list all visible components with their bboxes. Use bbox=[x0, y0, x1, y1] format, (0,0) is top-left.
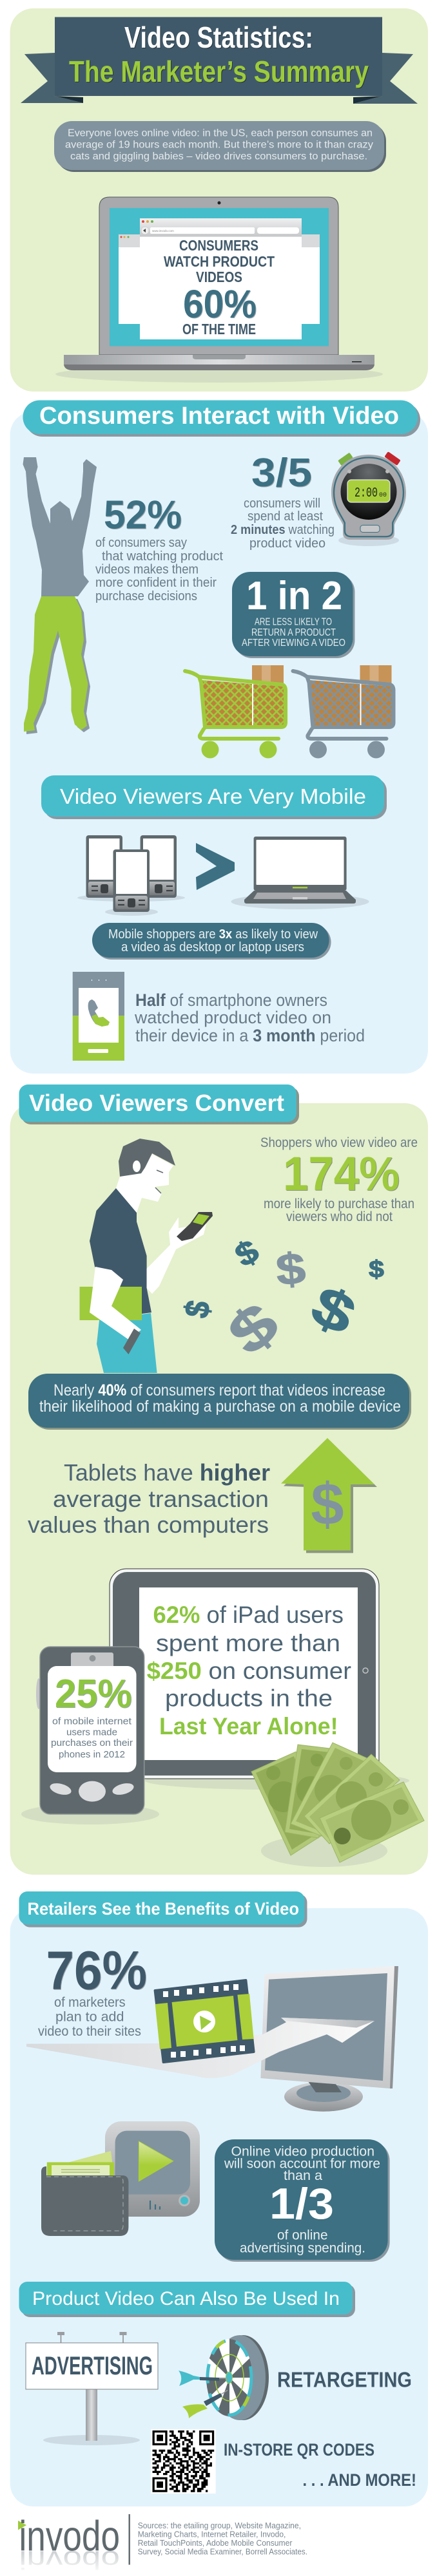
callout: nearly 40% bbox=[28, 1374, 411, 1430]
callout: online video production 1/3: will soon account for more bbox=[224, 2156, 380, 2171]
icon: advertising billboard: ADVERTISING bbox=[32, 2352, 153, 2380]
section heading: Consumers Interact with Video: Consumers Interact with Video bbox=[39, 402, 399, 430]
laptop with browser stat: WATCH PRODUCT bbox=[164, 253, 275, 270]
icon: stopwatch bbox=[331, 451, 406, 546]
icon: floating dollar signs: $ bbox=[369, 1256, 384, 1282]
section heading: Retailers See the Benefits of Video: Retailers See the Benefits of Video bbox=[27, 1899, 299, 1918]
logo: invodo: invodo bbox=[19, 2546, 120, 2574]
stat: 52%: more confident in their bbox=[95, 576, 217, 590]
callout: mobile shoppers 3x bbox=[92, 923, 331, 960]
stat: 76%: plan to add bbox=[55, 2010, 124, 2025]
panel: consumers interact with video bbox=[10, 401, 428, 1074]
callout: 1 in 2: 1 in 2 bbox=[246, 574, 342, 618]
stat: 52%: 52% bbox=[104, 493, 182, 537]
intro text pill: average of 19 hours each month. But there’s more to it than crazy bbox=[65, 139, 373, 151]
stat: 174%: Shoppers who view video are bbox=[260, 1135, 418, 1150]
panel: intro bbox=[10, 8, 428, 392]
panel: video viewers convert bbox=[10, 1084, 428, 1875]
logo: invodo bbox=[18, 2512, 120, 2574]
icon: floating dollar signs: $ bbox=[274, 1244, 307, 1294]
text: half of smartphone owners: Half of smartphone owners bbox=[135, 990, 327, 1010]
icon: floating dollar signs: $ bbox=[177, 1298, 218, 1321]
callout: online video production 1/3: than a bbox=[284, 2168, 322, 2183]
phone with 25% stat: users made bbox=[66, 1727, 117, 1738]
section heading: Consumers Interact with Video bbox=[23, 401, 420, 437]
intro text pill: Everyone loves online video: in the US, each person consumes an bbox=[68, 128, 373, 139]
callout: 1 in 2: RETURN A PRODUCT bbox=[251, 627, 336, 638]
section heading: Retailers See the Benefits of Video bbox=[19, 1891, 307, 1927]
icon: floating dollar signs bbox=[177, 1233, 384, 1368]
text: tablets have higher: Tablets have higher bbox=[64, 1459, 270, 1486]
callout: 1 in 2: AFTER VIEWING A VIDEO bbox=[242, 638, 345, 649]
phone with 25% stat: 25% bbox=[55, 1672, 132, 1716]
subheading: Product Video Can Also Be Used In bbox=[19, 2282, 355, 2317]
icon: greater-than sign bbox=[196, 843, 235, 890]
divider line bbox=[129, 2514, 130, 2564]
icon: stopwatch: 00 bbox=[379, 492, 387, 499]
label: retargeting: RETARGETING bbox=[277, 2367, 412, 2392]
icon: advertising billboard bbox=[26, 2332, 158, 2445]
text: tablets have higher bbox=[28, 1459, 270, 1538]
section heading: Video Viewers Convert bbox=[19, 1084, 299, 1124]
icon: video player bbox=[105, 2121, 200, 2217]
logo: invodo: invodo bbox=[19, 2512, 120, 2559]
icon: monitor bbox=[260, 1966, 398, 2112]
panel: retailers see the benefits bbox=[10, 1891, 428, 2506]
callout: 1 in 2: ARE LESS LIKELY TO bbox=[255, 617, 332, 627]
stat: 174%: viewers who did not bbox=[286, 1209, 393, 1224]
icon: up arrow with dollar bbox=[281, 1438, 377, 1553]
icon: fanned money bbox=[251, 1743, 424, 1867]
tablet with iPad stat: spent more than bbox=[156, 1630, 340, 1656]
title banner: The Marketer’s Summary bbox=[69, 55, 369, 88]
stat: 3/5: 2 minutes watching bbox=[231, 523, 335, 537]
stat: 3/5: spend at least bbox=[248, 509, 323, 524]
text: sources: Marketing Charts, Internet Retailer, Invodo, bbox=[138, 2530, 286, 2539]
laptop with browser stat bbox=[55, 197, 383, 383]
title banner bbox=[21, 17, 418, 104]
subheading: Video Viewers Are Very Mobile: Video Viewers Are Very Mobile bbox=[60, 784, 366, 808]
stat: 76%: 76% bbox=[46, 1940, 147, 2001]
stat: 174%: more likely to purchase than bbox=[264, 1197, 414, 1211]
icon: up arrow with dollar: $ bbox=[311, 1472, 344, 1537]
text: half of smartphone owners: watched product video on bbox=[134, 1008, 331, 1027]
tablet with iPad stat: Last Year Alone! bbox=[159, 1713, 338, 1739]
callout: 1 in 2 bbox=[232, 572, 354, 658]
stat: 52%: that watching product bbox=[102, 549, 223, 564]
laptop with browser stat: 60% bbox=[183, 282, 257, 326]
stat: 76%: of marketers bbox=[54, 1995, 126, 2010]
icon: stopwatch: 2:00 bbox=[354, 486, 378, 501]
laptop with browser stat: www.invodo.com bbox=[152, 229, 174, 232]
label: and more: . . . AND MORE! bbox=[303, 2470, 416, 2490]
icon: wallet with cash bbox=[41, 2151, 128, 2236]
stat: 3/5: consumers will bbox=[244, 497, 320, 511]
callout: mobile shoppers 3x: a video as desktop or laptop users bbox=[121, 940, 304, 954]
arrow: swoosh into monitor bbox=[26, 2018, 374, 2078]
callout: online video production 1/3 bbox=[215, 2139, 390, 2262]
phone with 25% stat: purchases on their bbox=[51, 1738, 133, 1748]
phone with 25% stat: phones in 2012 bbox=[59, 1749, 125, 1760]
stat: 3/5: 3/5 bbox=[251, 451, 312, 495]
stat: 3/5: product video bbox=[249, 536, 325, 551]
figure: person with arms raised bbox=[23, 457, 97, 734]
callout: nearly 40%: their likelihood of making a purchase on a mobile device bbox=[39, 1397, 401, 1416]
callout: online video production 1/3: of online bbox=[277, 2228, 327, 2242]
phone with 25% stat bbox=[21, 1647, 159, 1824]
icon: floating dollar signs: $ bbox=[302, 1274, 365, 1347]
callout: mobile shoppers 3x: Mobile shoppers are 3x as likely to view bbox=[108, 927, 318, 942]
callout: online video production 1/3: Online video production bbox=[231, 2145, 374, 2159]
icon: floating dollar signs: $ bbox=[229, 1233, 265, 1274]
icon: floating dollar signs: $ bbox=[215, 1289, 291, 1368]
text: sources: Sources: the etailing group, Website Magazine, bbox=[138, 2521, 301, 2530]
text: half of smartphone owners: their device in a 3 month period bbox=[135, 1026, 365, 1045]
stat: 52%: of consumers say bbox=[95, 536, 187, 550]
text: tablets have higher: values than computers bbox=[28, 1511, 269, 1538]
text: sources: Survey, Social Media Examiner, Borrell Associates. bbox=[138, 2547, 307, 2557]
icon: gray shopping cart bbox=[293, 665, 393, 759]
icon: laptop bbox=[231, 837, 369, 909]
tablet with iPad stat: 62% of iPad users bbox=[153, 1602, 344, 1628]
stat: 174% bbox=[260, 1135, 418, 1224]
laptop with browser stat: CONSUMERS bbox=[179, 237, 258, 254]
icon: half-filled smartphone bbox=[73, 972, 124, 1061]
icon: film strip with play button bbox=[155, 1980, 254, 2062]
tablet with iPad stat: products in the bbox=[165, 1685, 333, 1712]
section heading: Video Viewers Convert: Video Viewers Convert bbox=[29, 1090, 284, 1116]
callout: online video production 1/3: advertising spending. bbox=[240, 2241, 365, 2256]
figure: man looking at phone bbox=[80, 1139, 213, 1373]
stat: 174%: 174% bbox=[283, 1147, 400, 1200]
stat: 52%: purchase decisions bbox=[95, 589, 197, 603]
phone with 25% stat: of mobile internet bbox=[52, 1716, 132, 1727]
intro text pill: cats and giggling babies – video drives consumers to purchase. bbox=[70, 151, 367, 162]
text: half of smartphone owners bbox=[134, 990, 365, 1045]
icon: QR code bbox=[151, 2429, 216, 2494]
stat: 52% bbox=[95, 493, 223, 603]
stat: 52%: videos makes them bbox=[95, 563, 199, 577]
label: in-store QR codes: IN-STORE QR CODES bbox=[224, 2440, 374, 2459]
icon: three phones bbox=[77, 835, 185, 916]
callout: online video production 1/3: 1/3 bbox=[269, 2179, 334, 2228]
icon: dartboard with darts bbox=[179, 2335, 269, 2420]
tablet with iPad stat: $250 on consumer bbox=[147, 1658, 351, 1684]
callout: nearly 40%: Nearly 40% of consumers report that videos increase bbox=[53, 1381, 385, 1399]
subheading: Product Video Can Also Be Used In: Product Video Can Also Be Used In bbox=[32, 2288, 340, 2309]
laptop with browser stat: VIDEOS bbox=[196, 269, 242, 285]
text: sources: Retail TouchPoints, Adobe Mobile Consumer bbox=[138, 2538, 293, 2548]
intro text pill bbox=[54, 121, 386, 172]
laptop with browser stat: OF THE TIME bbox=[182, 321, 256, 337]
icon: green shopping cart bbox=[185, 665, 286, 759]
stat: 76% bbox=[38, 1940, 147, 2039]
tablet with iPad stat bbox=[110, 1569, 409, 1790]
stat: 76%: video to their sites bbox=[38, 2024, 141, 2039]
stat: 3/5 bbox=[231, 451, 335, 551]
text: tablets have higher: average transaction bbox=[53, 1486, 269, 1512]
title banner: Video Statistics: bbox=[124, 21, 313, 54]
text: sources bbox=[138, 2521, 307, 2557]
subheading: Video Viewers Are Very Mobile bbox=[41, 775, 387, 819]
